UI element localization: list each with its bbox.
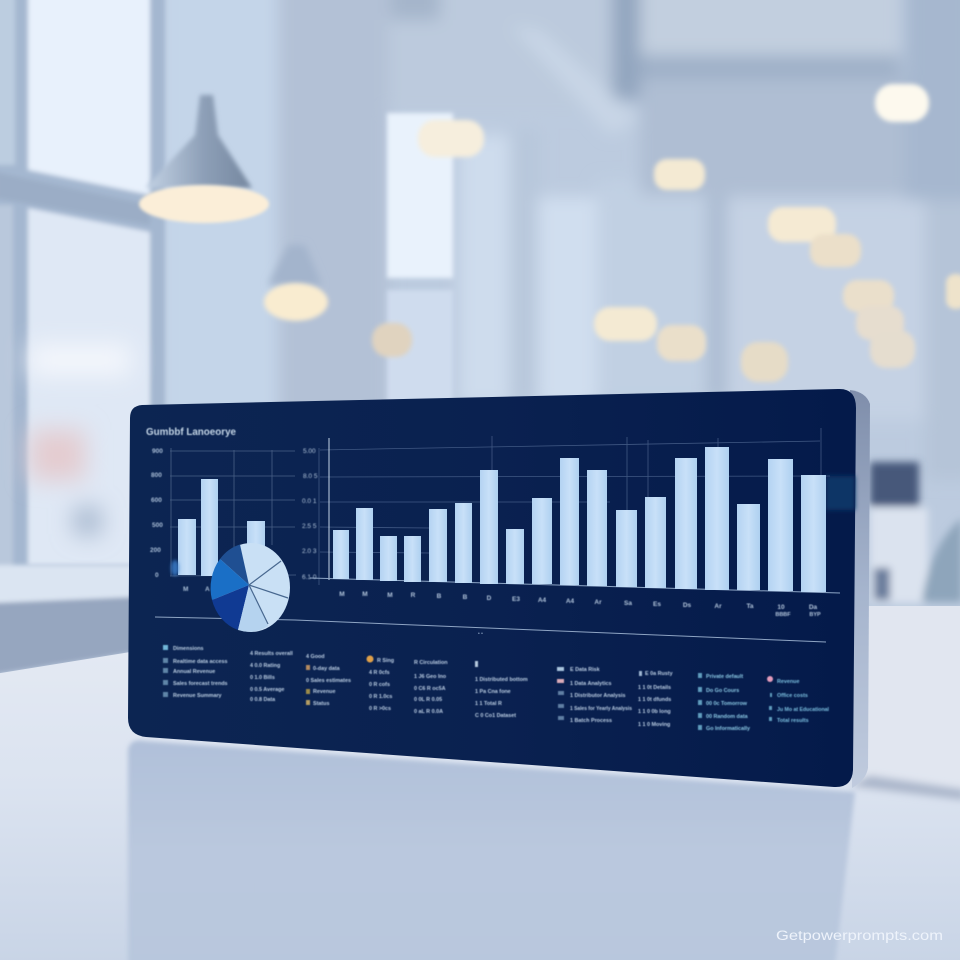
legend column 3: 0 Sales estimates (306, 678, 351, 684)
main chart month labels: BYP (809, 612, 821, 618)
legend column 4: 0 R >0cs (369, 706, 391, 712)
blurred office background (0, 0, 960, 680)
legend column 1: Dimensions (173, 646, 204, 652)
legend column 3: Status (313, 701, 329, 707)
main chart month labels: BBBF (775, 612, 791, 618)
main chart axis labels (302, 448, 318, 581)
main chart month labels: 10 (777, 604, 785, 611)
legend column 8: E 0a Rusty (645, 671, 673, 677)
legend column 9: Do Go Cours (706, 688, 739, 694)
legend column 7: 1 Distributor Analysis (570, 693, 626, 699)
legend column 2: 0 1.0 Bills (250, 675, 275, 681)
left chart axis labels: A (205, 586, 210, 593)
legend column 9: 00 0c Tomorrow (706, 701, 748, 707)
legend column 8 (638, 671, 673, 728)
legend column 5: 0 aL R 0.0A (414, 709, 443, 715)
centre window (387, 113, 453, 405)
legend column 8: 1 1 0 0b long (638, 709, 671, 715)
legend column 9: 00 Random data (706, 714, 749, 720)
legend column 7: 1 Sales for Yearly Analysis (570, 706, 632, 712)
legend column 9: Go Informatically (706, 726, 750, 732)
legend column 7: 1 Batch Process (570, 718, 612, 724)
legend column 10: Total results (777, 718, 809, 724)
main chart axis labels: 8.0 5 (303, 473, 318, 480)
table surface (0, 606, 960, 960)
main chart month labels: Es (653, 601, 661, 608)
legend column 9: Private default (706, 674, 743, 680)
main chart month labels: M (362, 591, 368, 598)
legend column 7 (557, 667, 632, 724)
legend column 5 (414, 660, 448, 715)
legend column 4: R Sing (377, 658, 394, 664)
legend columns (163, 645, 829, 732)
legend column 10: Ju Mo at Educational (777, 707, 829, 713)
legend column 8: 1 1 0t dfunds (638, 697, 671, 703)
legend column 4: 0 R 1.0cs (369, 694, 392, 700)
legend column 1 (163, 645, 228, 699)
main chart month labels: B (437, 593, 442, 600)
left chart axis labels: 500 (152, 522, 163, 529)
legend column 1: Annual Revenue (173, 669, 215, 675)
panel face (128, 389, 856, 787)
legend column 1: Sales forecast trends (173, 681, 228, 687)
main chart month labels: E3 (512, 596, 520, 603)
legend column 8: 1 1 0t Details (638, 685, 671, 691)
main chart axis labels: 5.00 (303, 448, 316, 455)
main chart month labels: D (487, 595, 492, 602)
legend column 3: 4 Good (306, 654, 325, 660)
legend column 8: 1 1 0 Moving (638, 722, 670, 728)
legend column 3: Revenue (313, 689, 335, 695)
window sill and counter (0, 565, 140, 674)
legend column 10: Revenue (777, 679, 799, 685)
left chart axis labels: 200 (150, 547, 161, 554)
left chart bars (178, 479, 265, 576)
main chart month labels: A4 (566, 598, 575, 605)
legend column 5: 0 C6 R oc5A (414, 686, 446, 692)
legend column 3 (306, 654, 351, 707)
watermark: Getpowerprompts.com (776, 928, 943, 943)
pendant lamp: large (139, 95, 269, 223)
left chart axis labels: M (183, 586, 188, 593)
panel title: Gumbbf Lanoeorye (146, 426, 236, 438)
ceiling lights (372, 84, 960, 382)
divider line (155, 617, 826, 642)
legend column 6: 1 Pa Cna fone (475, 689, 511, 695)
main chart month labels: Ds (683, 602, 692, 609)
legend column 7: 1 Data Analytics (570, 681, 611, 687)
left bar chart (150, 448, 296, 593)
legend column 2: 4 Results overall (250, 651, 293, 657)
legend column 5: 0 0L R 0.05 (414, 697, 442, 703)
left chart axis labels: 900 (152, 448, 163, 455)
dashboard panel: • • (478, 631, 483, 637)
panel side edge (850, 390, 870, 788)
main chart month labels: Sa (624, 600, 632, 607)
window: left (0, 0, 165, 605)
legend column 4: 0 R cofs (369, 682, 390, 688)
main chart month labels: Ar (594, 599, 602, 606)
main chart axis labels: 6.1 0 (302, 574, 317, 581)
legend column 7: E Data Risk (570, 667, 600, 673)
legend column 1: Revenue Summary (173, 693, 222, 699)
main chart axis labels: 2.5 5 (302, 523, 317, 530)
main chart month labels: A4 (538, 597, 547, 604)
legend column 9 (698, 673, 750, 732)
main chart axis labels: 2.0 3 (302, 548, 317, 555)
left chart axis labels: 0 (155, 572, 159, 579)
legend column 10: Office costs (777, 693, 808, 699)
main chart month labels: M (387, 592, 393, 599)
legend column 2 (250, 651, 293, 703)
dashboard panel (128, 389, 870, 788)
legend column 10 (767, 676, 829, 724)
legend column 5: R Circulation (414, 660, 448, 666)
legend column 3: 0-day data (313, 666, 341, 672)
legend column 6: C 0 Co1 Dataset (475, 713, 516, 719)
legend column 6: 1 1 Total R (475, 701, 502, 707)
main chart month labels: R (411, 592, 416, 599)
main bar chart (302, 428, 840, 618)
legend column 6: 1 Distributed bottom (475, 677, 528, 683)
legend column 2: 4 0.0 Rating (250, 663, 280, 669)
main chart baseline (310, 578, 840, 593)
main chart month labels: B (463, 594, 468, 601)
legend column 1: Realtime data access (173, 659, 228, 665)
main chart month labels: Ta (746, 603, 754, 610)
pendant lamp: lower left (264, 245, 328, 321)
legend column 6 (475, 661, 528, 719)
legend column 2: 0 0.5 Average (250, 687, 284, 693)
main chart axis labels: 0.0 1 (302, 498, 317, 505)
pie chart (211, 543, 290, 632)
legend column 4 (366, 656, 394, 712)
main chart month labels: M (339, 591, 345, 598)
legend column 4: 4 R 0cfs (369, 670, 390, 676)
main chart month labels: Da (809, 604, 818, 611)
left chart axis labels: 800 (151, 472, 162, 479)
legend column 2: 0 0.8 Data (250, 697, 276, 703)
main chart month labels (339, 591, 821, 618)
right side furniture (870, 462, 960, 603)
main chart bars (333, 447, 826, 592)
legend column 5: 1 J6 Geo Ino (414, 674, 447, 680)
left chart axis labels (150, 448, 210, 593)
left chart axis labels: 600 (151, 497, 162, 504)
main chart month labels: Ar (714, 603, 722, 610)
